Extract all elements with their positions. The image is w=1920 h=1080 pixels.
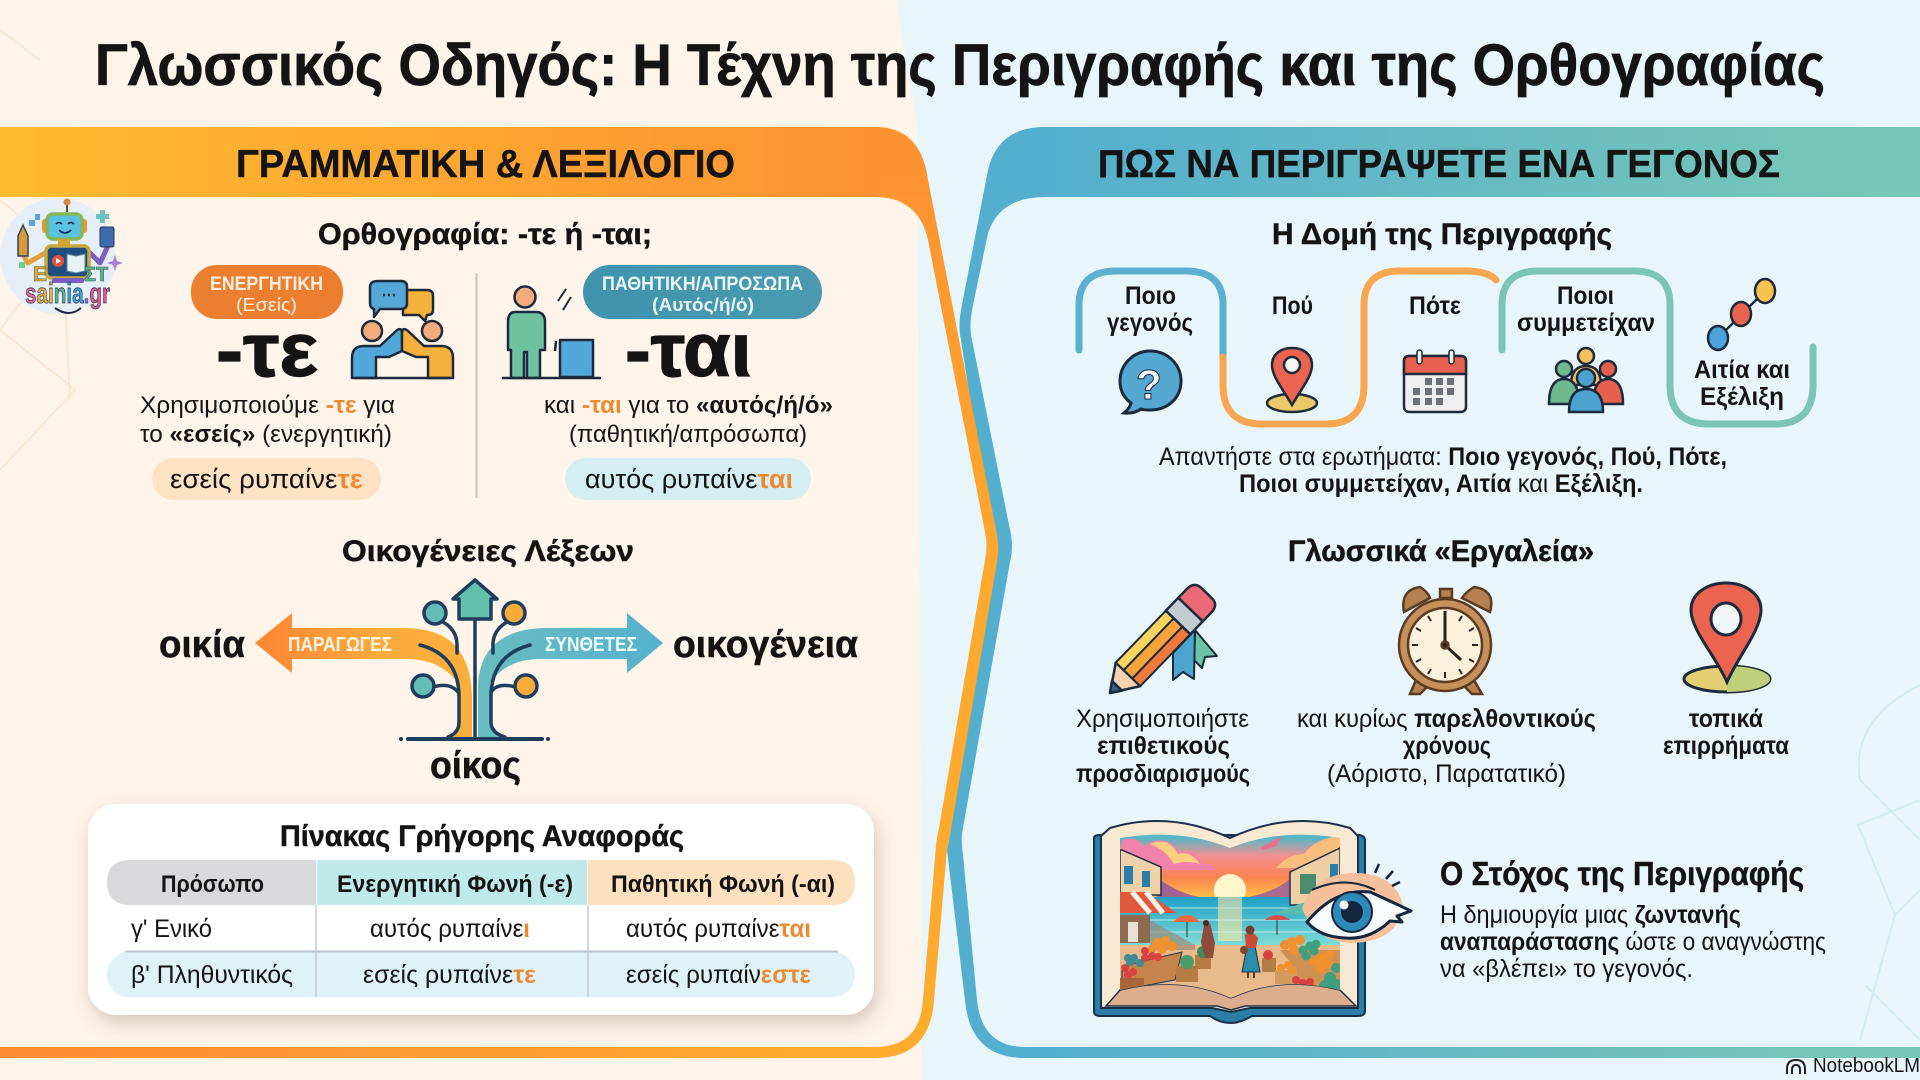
logo: sainia.gr robot: ΣΤ bbox=[84, 264, 108, 286]
badge: active voice bbox=[191, 265, 343, 319]
label: οικογένεια: οικογένεια bbox=[673, 624, 858, 666]
diagram: word family tree: ΠΑΡΑΓΩΓΕΣ bbox=[288, 634, 392, 656]
badge: active voice: ΕΝΕΡΓΗΤΙΚΗ bbox=[210, 274, 323, 295]
logo: sainia.gr robot: sainia.gr bbox=[25, 278, 110, 310]
icon: map pin bbox=[1267, 348, 1317, 412]
text: tool past tenses: χρόνους bbox=[1403, 732, 1491, 760]
table row: third singular: αυτός ρυπαίνει bbox=[370, 915, 530, 943]
suffix: -ται: -ται bbox=[625, 308, 752, 393]
heading: language tools: Γλωσσικά «Εργαλεία» bbox=[1288, 535, 1594, 568]
panel frame: left (orange) bbox=[0, 127, 998, 1058]
table row: third singular: γ' Ενικό bbox=[131, 915, 212, 943]
example: αυτός ρυπαίνεται bbox=[565, 458, 811, 500]
example: εσείς ρυπαίνετε bbox=[152, 458, 381, 500]
table row: second plural: β' Πληθυντικός bbox=[131, 961, 293, 989]
badge: active voice: (Εσείς) bbox=[236, 295, 297, 315]
text: passive rule bbox=[544, 392, 833, 448]
table row: second plural bbox=[107, 952, 855, 997]
badge: passive voice: (Αυτός/ή/ό) bbox=[652, 295, 754, 315]
step: Πού: Πού bbox=[1272, 292, 1313, 320]
table row: second plural: εσείς ρυπαίνετε bbox=[363, 961, 536, 989]
example: αυτός ρυπαίνεται: αυτός ρυπαίνεται bbox=[585, 464, 793, 494]
text: goal body: Η δημιουργία μιας ζωντανής bbox=[1440, 901, 1741, 929]
text: tool past tenses: (Αόριστο, Παρατατικό) bbox=[1327, 760, 1566, 788]
heading: grammar section: ΓΡΑΜΜΑΤΙΚΗ & ΛΕΞΙΛΟΓΙΟ bbox=[236, 143, 735, 186]
diagram: word family tree: ΣΥΝΘΕΤΕΣ bbox=[545, 634, 637, 656]
heading: structure: Η Δομή της Περιγραφής bbox=[1272, 218, 1612, 251]
table row: third singular bbox=[131, 915, 811, 943]
text: tool adjectives: Χρησιμοποιήστε bbox=[1076, 705, 1249, 733]
table row: third singular: αυτός ρυπαίνεται bbox=[626, 915, 811, 943]
text: tool past tenses bbox=[1297, 705, 1596, 788]
text: answer the questions: Ποιοι συμμετείχαν, Αιτία και Εξέλιξη. bbox=[1239, 470, 1643, 498]
heading: word families: Οικογένειες Λέξεων bbox=[342, 535, 634, 568]
illustration: open book with market scene and eye bbox=[1094, 821, 1411, 1023]
icon: person and podium bbox=[502, 286, 601, 378]
text: tool adjectives: επιθετικούς bbox=[1097, 732, 1230, 760]
table header row bbox=[107, 860, 855, 905]
text: goal body: αναπαράστασης ώστε ο αναγνώστης bbox=[1440, 928, 1826, 956]
text: tool adverbs: επιρρήματα bbox=[1663, 732, 1790, 760]
logo: sainia.gr robot: Ε bbox=[33, 263, 47, 286]
text: tool adverbs bbox=[1663, 705, 1790, 760]
text: tool adverbs: τοπικά bbox=[1689, 705, 1764, 733]
icon: question bubble bbox=[1120, 351, 1181, 413]
suffix: -τε: -τε bbox=[216, 308, 318, 393]
step: Αιτία και Εξέλιξη: Εξέλιξη bbox=[1700, 383, 1784, 411]
step: Ποιοι συμμετείχαν: συμμετείχαν bbox=[1517, 309, 1655, 337]
text: active rule: το «εσείς» (ενεργητική) bbox=[140, 421, 392, 448]
step: Ποιο γεγονός: Ποιο bbox=[1125, 282, 1176, 310]
step: Ποιοι συμμετείχαν: Ποιοι bbox=[1557, 282, 1614, 310]
text: tool adjectives: προσδιαρισμούς bbox=[1076, 760, 1250, 788]
icon: question bubble: ? bbox=[1136, 361, 1162, 408]
table header row: Πρόσωπο bbox=[161, 871, 264, 898]
table row: second plural: εσείς ρυπαίνεστε bbox=[626, 961, 811, 989]
text: active rule bbox=[140, 392, 395, 448]
icon: group of people bbox=[1549, 348, 1623, 412]
label: οίκος: οίκος bbox=[430, 745, 521, 787]
text: goal body bbox=[1440, 901, 1826, 983]
icon: two people talking bbox=[352, 281, 453, 378]
text: passive rule: και -ται για το «αυτός/ή/ό» bbox=[544, 392, 833, 419]
flow path: structure snake bbox=[1079, 271, 1813, 424]
panel frame: right (blue) bbox=[947, 127, 1920, 1058]
icon: calendar bbox=[1404, 350, 1466, 412]
text: goal body: να «βλέπει» το γεγονός. bbox=[1440, 955, 1693, 983]
label: οικία: οικία bbox=[159, 624, 245, 666]
diagram: word family tree bbox=[255, 580, 663, 741]
icon: alarm clock bbox=[1399, 587, 1491, 694]
text: answer the questions bbox=[1159, 443, 1727, 498]
heading: spelling: Ορθογραφία: -τε ή -ται; bbox=[318, 218, 652, 251]
icon: causal chain bbox=[1708, 279, 1775, 350]
step: Ποιο γεγονός bbox=[1107, 282, 1193, 337]
table header row: Παθητική Φωνή (-αι) bbox=[611, 871, 835, 898]
logo: sainia.gr robot bbox=[0, 198, 123, 314]
divider bbox=[476, 273, 478, 498]
step: Ποιοι συμμετείχαν bbox=[1517, 282, 1655, 337]
step: Αιτία και Εξέλιξη bbox=[1694, 356, 1790, 411]
title: Γλωσσικός Οδηγός: Η Τέχνη της Περιγραφής και της Ορθογραφίας bbox=[95, 33, 1825, 98]
example: εσείς ρυπαίνετε: εσείς ρυπαίνετε bbox=[170, 464, 363, 494]
text: tool adjectives bbox=[1076, 705, 1250, 788]
table header row: Ενεργητική Φωνή (-ε) bbox=[337, 871, 573, 898]
heading: goal of the description: Ο Στόχος της Περιγραφής bbox=[1440, 855, 1804, 892]
table title: Πίνακας Γρήγορης Αναφοράς bbox=[280, 820, 684, 853]
badge: passive voice bbox=[583, 265, 822, 319]
text: active rule: Χρησιμοποιούμε -τε για bbox=[140, 392, 395, 419]
step: Αιτία και Εξέλιξη: Αιτία και bbox=[1694, 356, 1790, 384]
step: Ποιο γεγονός: γεγονός bbox=[1107, 309, 1193, 337]
icon: pencil with ribbon bbox=[1098, 581, 1219, 705]
text: passive rule: (παθητική/απρόσωπα) bbox=[569, 421, 807, 448]
text: tool past tenses: και κυρίως παρελθοντικούς bbox=[1297, 705, 1596, 733]
panel: quick reference table bbox=[88, 804, 874, 1015]
step: Πότε: Πότε bbox=[1409, 292, 1461, 320]
text: answer the questions: Απαντήστε στα ερωτήματα: Ποιο γεγονός, Πού, Πότε, bbox=[1159, 443, 1727, 471]
icon: big map pin bbox=[1684, 583, 1770, 692]
badge: passive voice: ΠΑΘΗΤΙΚΗ/ΑΠΡΟΣΩΠΑ bbox=[602, 274, 803, 295]
heading: describe section: ΠΩΣ ΝΑ ΠΕΡΙΓΡΑΨΕΤΕ ΕΝΑ ΓΕΓΟΝΟΣ bbox=[1098, 143, 1780, 186]
